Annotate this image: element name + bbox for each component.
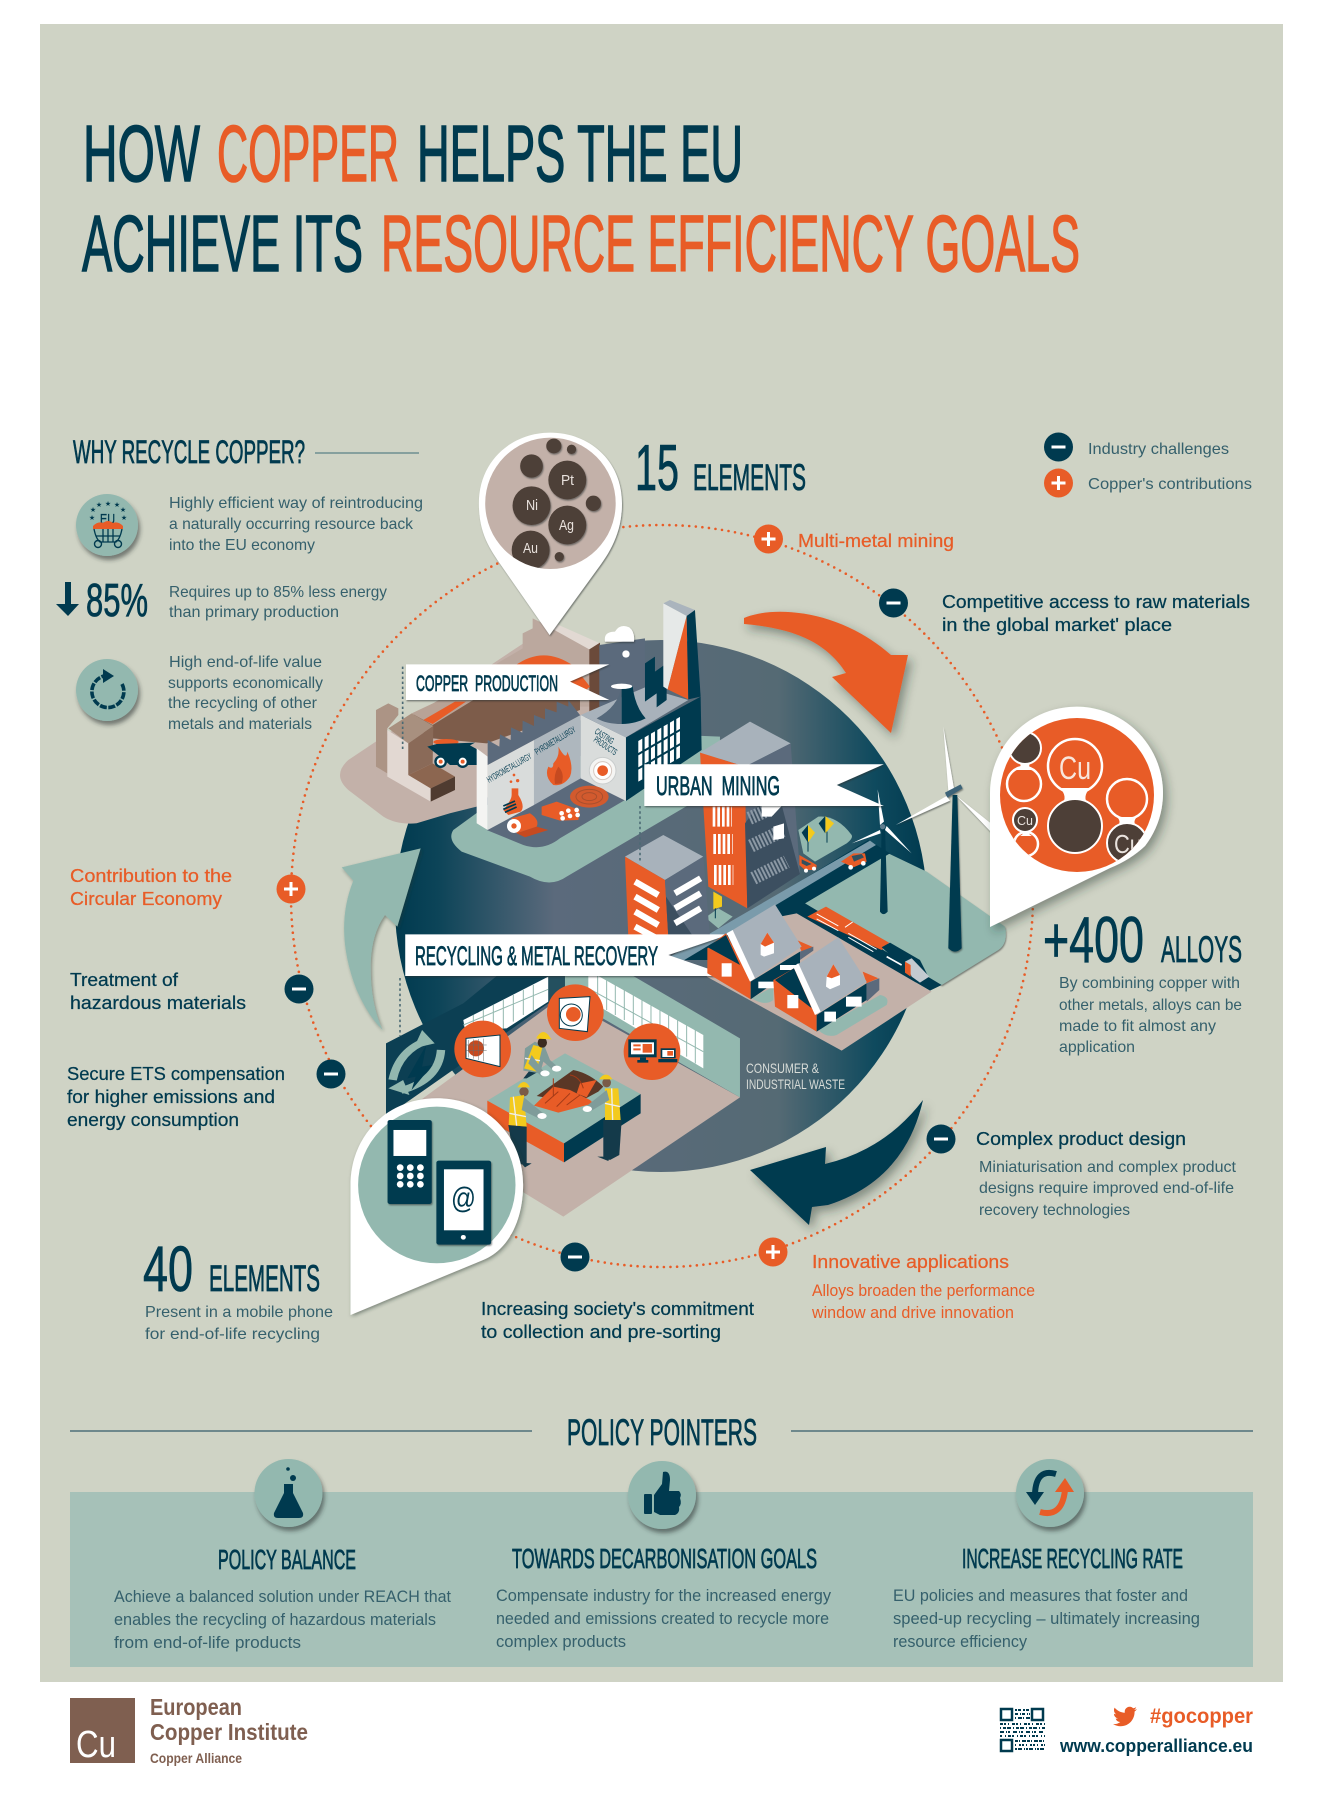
policy column: balance: enables the recycling of hazardous materials [114, 1610, 436, 1629]
dotted cycle ring [291, 525, 1033, 1267]
title [82, 109, 1080, 288]
right wall [565, 976, 740, 1097]
hashtag: #gocopper [1150, 1705, 1253, 1728]
floor [412, 1000, 740, 1217]
policy column: recycling rate: resource efficiency [893, 1632, 1027, 1651]
icon: EU cart: ★ [105, 500, 111, 508]
stat: 400 alloys: other metals, alloys can be [1059, 997, 1242, 1014]
factory wall labels: PRODUCTS [592, 734, 619, 757]
stat: 40 elements: Present in a mobile phone [145, 1304, 333, 1321]
icon: appliance circle 2 [547, 984, 604, 1041]
banner texts: URBAN MINING [656, 771, 780, 801]
factory ground [451, 733, 720, 882]
stat: 400 alloys: By combining copper with [1059, 975, 1240, 992]
banner texts [415, 671, 780, 971]
icon: EU cart: ★ [90, 506, 96, 514]
globe [395, 640, 927, 1172]
arrow: orange [744, 612, 908, 733]
icon: recycling sign [388, 1030, 441, 1095]
factory wall labels: CASTING [593, 726, 616, 746]
icon: smartphone [436, 1161, 491, 1245]
worker 3 [583, 1075, 622, 1161]
turbine small [852, 789, 912, 914]
policy column: balance: from end-of-life products [114, 1633, 301, 1652]
title: HOW [83, 109, 200, 198]
stat: 400 alloys: made to fit almost any [1059, 1018, 1216, 1035]
scrap pile [534, 1070, 603, 1113]
item: multi-metal mining: Multi-metal mining [798, 531, 954, 551]
train [807, 907, 929, 983]
stat: 40 elements [143, 1233, 333, 1343]
text: efficient way: into the EU economy [169, 537, 315, 554]
item: secure ETS: energy consumption [67, 1110, 239, 1130]
tree patch [798, 817, 852, 862]
factory wall labels: HYDROMETALLURGY [485, 751, 533, 785]
icon: mobile phone [388, 1120, 432, 1204]
item: complex product design: Miniaturisation and complex product [979, 1159, 1237, 1176]
logo: European Copper Institute [70, 1694, 308, 1766]
legend [1044, 432, 1252, 498]
item: circular economy: Circular Economy [70, 889, 222, 909]
text: consumer and industrial waste: CONSUMER & [746, 1060, 820, 1076]
tall building [700, 722, 800, 908]
factory [477, 600, 702, 847]
item: hazardous materials: hazardous materials [70, 993, 246, 1013]
pin: alloys: Cu [1017, 813, 1033, 828]
banner: copper production [406, 664, 609, 700]
legend: Copper's contributions [1088, 476, 1252, 493]
icon: EU cart: ★ [96, 501, 102, 509]
item: society commitment: to collection and pre-sorting [481, 1322, 721, 1342]
banner texts: COPPER PRODUCTION [416, 671, 558, 696]
isometric scene: copper production [340, 600, 720, 882]
icon: EU cart: ★ [121, 514, 127, 522]
truck [427, 739, 478, 768]
policy column: balance: Achieve a balanced solution under REACH that [114, 1587, 451, 1606]
mine tower [376, 703, 455, 802]
arrow: green [342, 848, 421, 1030]
turbine big [896, 727, 992, 952]
icon: appliance circle 3 [624, 1023, 680, 1080]
copper production ground [340, 643, 600, 824]
item: innovative applications: window and drive innovation [811, 1303, 1014, 1322]
icon: EU cart: ★ [114, 501, 120, 509]
logo: European Copper Institute: Copper Alliance [150, 1750, 242, 1766]
icon: thumb [628, 1461, 696, 1529]
icon: EU cart: ★ [89, 514, 95, 522]
leader line: recycling [399, 978, 401, 1036]
item: innovative applications: Alloys broaden the performance [812, 1281, 1035, 1300]
stat: 400 alloys: +400 [1043, 903, 1144, 976]
stat: 40 elements: ELEMENTS [209, 1258, 320, 1299]
worker 2 [508, 1082, 547, 1167]
item: secure ETS: for higher emissions and [67, 1087, 275, 1107]
isometric scene: urban mining [670, 722, 1006, 1051]
text: end of life value: High end-of-life value [169, 654, 322, 671]
icon: flask [254, 1459, 322, 1527]
green lobe with turbines [805, 853, 1006, 985]
pin: 15 elements [479, 433, 622, 635]
table [487, 1053, 641, 1162]
policy column: balance: POLICY BALANCE [218, 1544, 356, 1575]
legend: Industry challenges [1088, 441, 1229, 458]
logo: European Copper Institute: Copper Institute [150, 1719, 308, 1745]
text: less energy: than primary production [169, 604, 339, 621]
icon: EU cart: EU [100, 511, 115, 528]
isometric scene: small building [625, 835, 710, 938]
pin: 15 elements: Au [523, 540, 538, 557]
item: complex product design: Complex product design [976, 1129, 1186, 1149]
policy column: decarbonisation: complex products [496, 1632, 626, 1651]
house 2 [773, 937, 879, 1032]
policy column: decarbonisation: Compensate industry for the increased energy [496, 1586, 831, 1605]
policy column: decarbonisation: TOWARDS DECARBONISATION GOALS [512, 1543, 817, 1574]
title: ACHIEVE ITS [82, 199, 363, 288]
icon: recycle arrows [1016, 1459, 1084, 1527]
factory products and process icons [503, 747, 616, 837]
leader line [400, 667, 405, 750]
item: secure ETS: Secure ETS compensation [67, 1064, 285, 1084]
item: innovative applications: Innovative applications [812, 1252, 1009, 1272]
logo: European Copper Institute: Cu [76, 1724, 116, 1766]
policy column: recycling rate [893, 1459, 1200, 1651]
road [670, 840, 942, 991]
item: complex product design: recovery technologies [979, 1202, 1130, 1219]
policy column: decarbonisation: needed and emissions created to recycle more [496, 1609, 829, 1628]
banner: recycling and metal recovery [405, 934, 729, 976]
pin: 15 elements: Ag [559, 517, 574, 534]
factory wall labels [485, 724, 619, 785]
policy column: decarbonisation [496, 1461, 831, 1651]
text: efficient way [169, 495, 423, 554]
policy column: balance [114, 1459, 451, 1652]
item: complex product design [926, 1124, 1237, 1219]
small green patch [707, 908, 733, 928]
pin: alloys: Cu [1114, 829, 1142, 859]
item: innovative applications [758, 1238, 1035, 1322]
item: competitive access: in the global market' place [942, 615, 1172, 635]
icon: twitter bird [1113, 1707, 1137, 1726]
text: end of life value: metals and materials [168, 716, 312, 733]
item: hazardous materials [70, 970, 314, 1013]
trees [713, 816, 834, 918]
stat: 40 elements: for end-of-life recycling [145, 1326, 320, 1343]
title: COPPER [217, 109, 399, 198]
heading: why recycle copper: WHY RECYCLE COPPER? [73, 434, 305, 470]
at sign: @ [451, 1182, 476, 1215]
stat: 15 elements: ELEMENTS [693, 457, 806, 498]
stat: 400 alloys: application [1059, 1039, 1135, 1056]
heading: policy pointers: POLICY POINTERS [567, 1412, 757, 1453]
stat: 400 alloys: ALLOYS [1161, 929, 1242, 970]
pin: 40 elements phone [351, 1098, 523, 1315]
houses [683, 904, 887, 1036]
item: multi-metal mining [754, 524, 954, 554]
arrow: dark [750, 1100, 923, 1225]
worker 1 [523, 1032, 561, 1078]
garden patches [752, 987, 887, 1036]
text: efficient way: a naturally occurring resource back [169, 516, 414, 533]
title: HELPS THE EU [417, 109, 743, 198]
houses ground [707, 913, 932, 1051]
item: society commitment: Increasing society's commitment [481, 1299, 754, 1319]
text: end of life value: the recycling of other [168, 695, 318, 712]
item: society commitment [481, 1242, 754, 1342]
stat: 15 elements [635, 431, 806, 504]
pin: alloys: Cu [1059, 750, 1091, 786]
stat: 400 alloys [1043, 903, 1242, 1056]
icon: EU cart [76, 494, 138, 556]
policy column: recycling rate: speed-up recycling – ultimately increasing [893, 1609, 1200, 1628]
text: less energy: Requires up to 85% less energy [169, 584, 387, 601]
icon: appliance circle 1 [454, 1021, 511, 1077]
banner texts: RECYCLING & METAL RECOVERY [415, 941, 658, 971]
item: secure ETS [67, 1060, 346, 1130]
house 1 [683, 904, 813, 999]
smelter building [403, 618, 600, 743]
item: competitive access [879, 588, 1250, 635]
pin: 15 elements: Pt [561, 472, 575, 489]
website: www.copperalliance.eu [1059, 1736, 1253, 1756]
cars [799, 853, 867, 873]
item: competitive access: Competitive access to raw materials [942, 592, 1250, 612]
icon: cycle [76, 659, 138, 721]
icon: EU cart: ★ [120, 506, 126, 514]
panel: policy band [70, 1492, 1253, 1667]
banner: urban mining [644, 764, 884, 806]
factory wall labels: PYROMETALLURGY [533, 724, 577, 757]
logo: European Copper Institute: European [150, 1694, 242, 1720]
stat: 85 percent: 85% [86, 574, 148, 626]
QR code [1000, 1709, 1045, 1751]
policy column: recycling rate: EU policies and measures that foster and [893, 1586, 1188, 1605]
item: circular economy [70, 866, 306, 909]
text: consumer and industrial waste [746, 1060, 845, 1092]
item: hazardous materials: Treatment of [70, 970, 179, 990]
stat: 40 elements: 40 [143, 1233, 193, 1305]
text: end of life value: supports economically [168, 675, 323, 692]
left wall [386, 976, 565, 1117]
text: end of life value [168, 654, 323, 733]
text: consumer and industrial waste: INDUSTRIAL WASTE [746, 1076, 845, 1092]
isometric scene: recycling room [386, 976, 740, 1217]
pin: alloys [990, 707, 1163, 927]
text: less energy [169, 584, 387, 621]
leader line: urban mining [639, 806, 641, 862]
item: circular economy: Contribution to the [70, 866, 232, 886]
item: complex product design: designs require improved end-of-life [979, 1180, 1234, 1197]
pin: 15 elements: Ni [526, 497, 538, 514]
stat: 85 percent [56, 574, 148, 626]
text: efficient way: Highly efficient way of reintroducing [169, 495, 423, 512]
stat: 15 elements: 15 [635, 431, 679, 504]
